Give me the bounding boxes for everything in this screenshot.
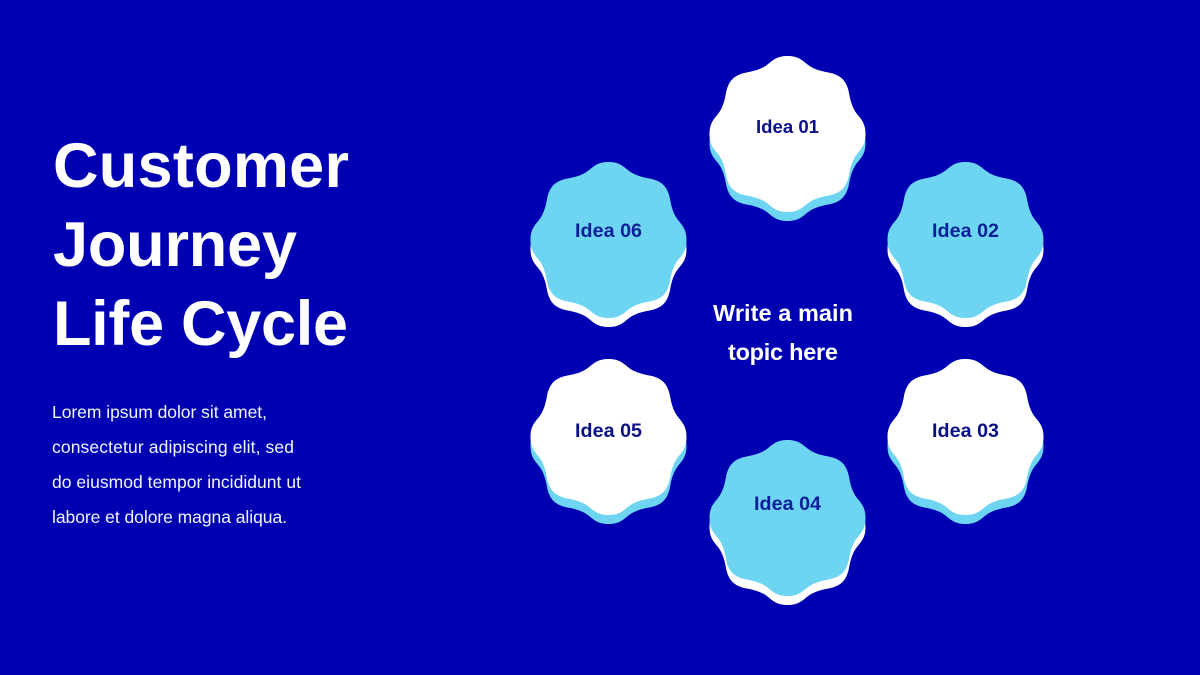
title: Customer: [53, 131, 349, 201]
title: Life Cycle: [53, 289, 348, 359]
body text: labore et dolore magna aliqua.: [52, 507, 287, 527]
body text: do eiusmod tempor incididunt ut: [52, 472, 301, 492]
body text: consectetur adipiscing elit, sed: [52, 437, 294, 457]
main topic: topic here: [728, 339, 838, 365]
title: Journey: [53, 210, 297, 280]
badge: Idea 04: Idea 04: [754, 493, 821, 515]
badge: Idea 06: Idea 06: [575, 220, 642, 242]
badge: Idea 03: [888, 359, 1044, 524]
main topic: [713, 300, 853, 365]
badge: Idea 02: Idea 02: [932, 220, 999, 242]
badge: Idea 01: Idea 01: [756, 116, 819, 137]
body text: Lorem ipsum dolor sit amet,: [52, 402, 267, 422]
badge: Idea 06: [530, 162, 686, 327]
badge: Idea 02: [888, 162, 1044, 327]
badge: Idea 01: [710, 56, 866, 221]
badge: Idea 03: Idea 03: [932, 420, 999, 442]
badge: Idea 05: Idea 05: [575, 420, 642, 442]
main topic: Write a main: [713, 300, 853, 326]
title: [53, 131, 349, 359]
badge: Idea 05: [530, 359, 686, 524]
body text: [52, 402, 301, 527]
badge: Idea 04: [710, 440, 866, 605]
